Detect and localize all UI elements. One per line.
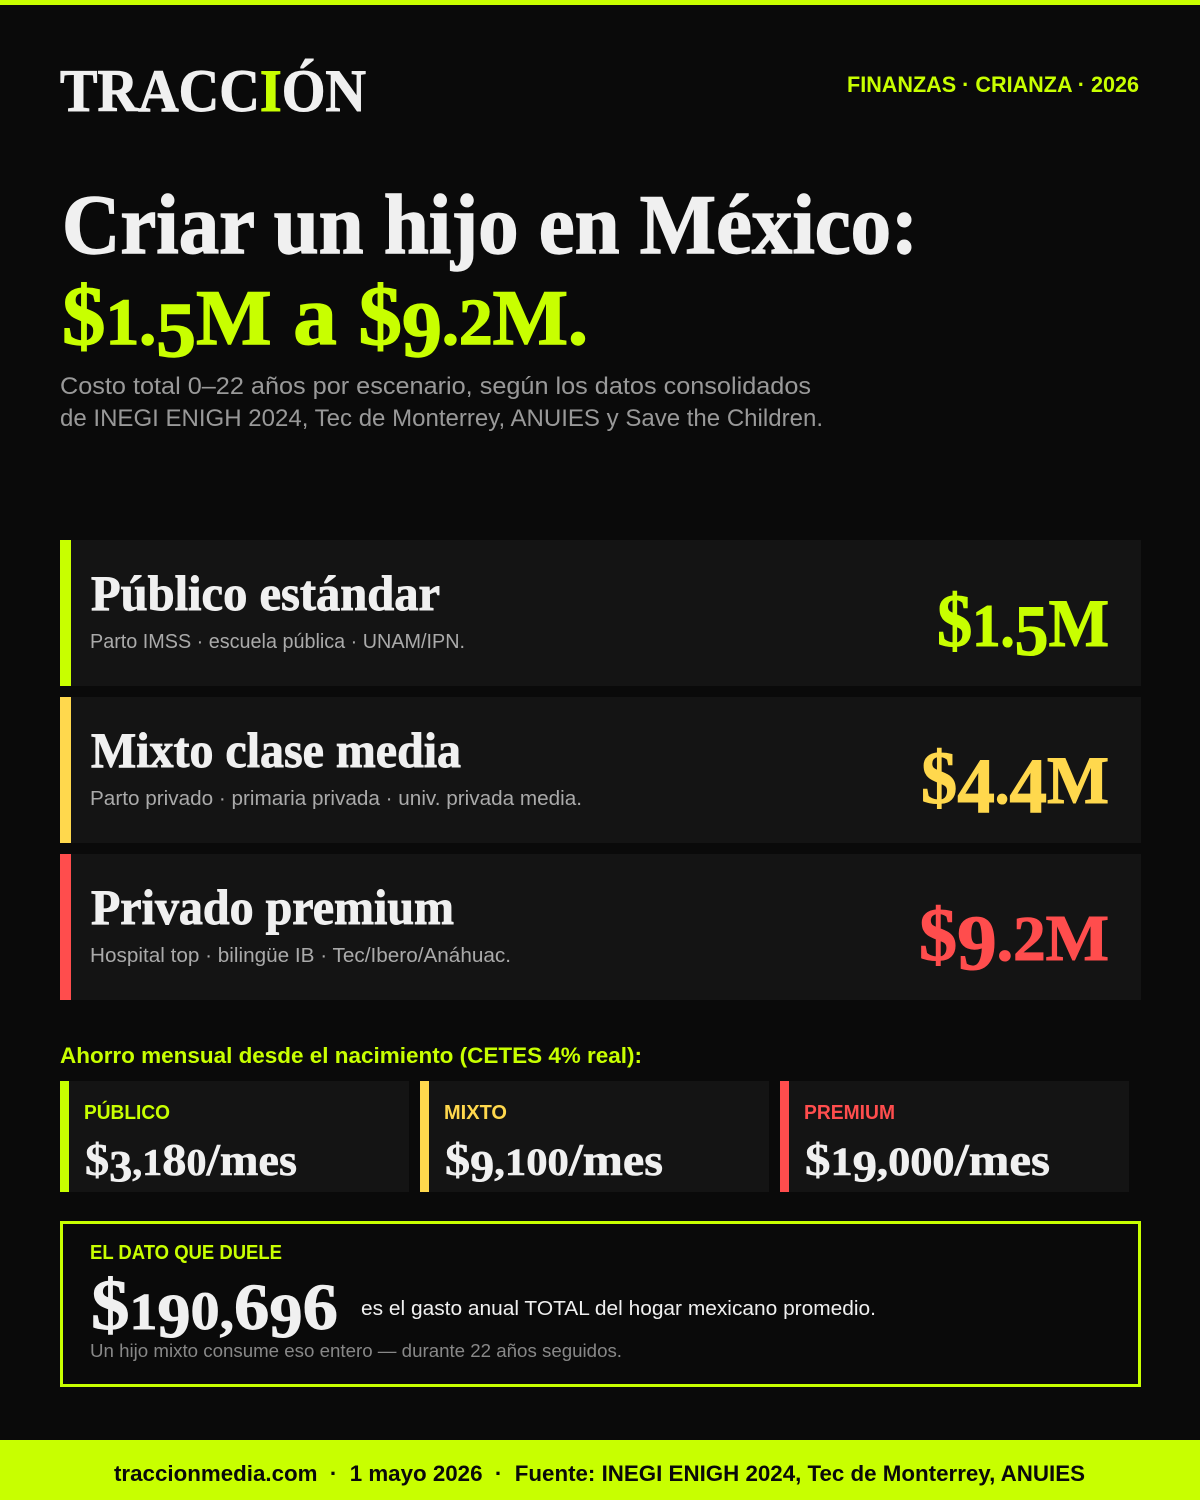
header <box>60 58 1139 124</box>
savings amount: ,100 <box>494 1141 569 1184</box>
scenario cost: 5 <box>1015 591 1049 671</box>
scenario cost: M <box>1046 902 1109 975</box>
callout note: Un hijo mixto consume eso entero — durante 22 años seguidos. <box>90 1341 622 1361</box>
scenario cost: 4 <box>957 742 995 829</box>
savings amount: 9 <box>470 1142 494 1191</box>
savings amount: $ <box>85 1134 108 1185</box>
logo: TRACCIÓN <box>60 58 366 124</box>
scenario cost: 4 <box>1009 742 1047 829</box>
title block <box>62 178 918 373</box>
savings label: PREMIUM <box>804 1102 895 1124</box>
title line 2: M <box>196 274 272 361</box>
savings amount: 80/mes <box>162 1134 293 1185</box>
title line 2: M. <box>493 274 588 361</box>
scenario cost: $ <box>921 737 958 820</box>
scenario cost: $ <box>919 894 956 977</box>
savings amount: /mes <box>955 1134 1042 1185</box>
subtitle: de INEGI ENIGH 2024, Tec de Monterrey, ANUIES y Save the Children. <box>60 405 823 432</box>
savings label: MIXTO <box>444 1102 507 1124</box>
callout figure: $1 <box>91 1265 156 1345</box>
callout figure: 0, <box>191 1281 234 1341</box>
callout figure: 6 <box>234 1271 269 1344</box>
subtitle: Costo total 0–22 años por escenario, según los datos consolidados <box>60 373 811 400</box>
savings amount: ,1 <box>132 1142 162 1184</box>
footer <box>0 1440 1200 1500</box>
scenario description: Parto IMSS · escuela pública · UNAM/IPN. <box>90 631 465 653</box>
scenario cost: M <box>1047 742 1109 818</box>
title line 2: $1. <box>62 269 155 363</box>
scenario cost: M <box>1049 585 1109 661</box>
subtitle <box>60 373 823 432</box>
savings amount: $1 <box>805 1134 850 1185</box>
title line 2: a $ <box>293 269 399 363</box>
panel: ahorro mixto <box>420 1081 769 1192</box>
scenario cost: 9 <box>957 899 997 986</box>
savings amount: $ <box>445 1134 468 1185</box>
panel: privado premium <box>60 854 1141 1000</box>
callout: el dato que duele <box>62 1222 1140 1386</box>
scenario description: Parto privado · primaria privada · univ. privada media. <box>90 788 582 810</box>
title line 2: 9 <box>402 286 442 373</box>
scenario name: Mixto clase media <box>91 722 461 778</box>
title line 2: .2 <box>442 286 493 359</box>
callout label: EL DATO QUE DUELE <box>90 1242 282 1264</box>
savings amount: ,000 <box>877 1139 955 1184</box>
panel: ahorro público <box>60 1081 409 1192</box>
savings amount: /mes <box>569 1134 656 1185</box>
panel: mixto clase media <box>60 697 1141 843</box>
savings label: PÚBLICO <box>84 1100 170 1124</box>
scenario name: Privado premium <box>91 879 454 935</box>
title line 1: Criar un hijo en México: <box>62 178 918 272</box>
scenario cost: $1. <box>937 580 1017 663</box>
panel: público estándar <box>60 540 1141 686</box>
scenario cost: .2 <box>997 903 1046 974</box>
panel: ahorro premium <box>780 1081 1129 1192</box>
scenario cost: . <box>995 750 1009 816</box>
scenario description: Hospital top · bilingüe IB · Tec/Ibero/Anáhuac. <box>90 945 511 967</box>
savings heading: Ahorro mensual desde el nacimiento (CETES 4% real): <box>60 1043 642 1068</box>
callout statement: es el gasto anual TOTAL del hogar mexicano promedio. <box>361 1298 876 1320</box>
header tag: FINANZAS · CRIANZA · 2026 <box>847 72 1139 97</box>
callout figure: 9 <box>269 1283 303 1351</box>
callout figure: 6 <box>303 1271 338 1344</box>
savings amount: 9 <box>853 1142 877 1191</box>
title line 2: 5 <box>156 286 196 373</box>
scenario name: Público estándar <box>91 565 440 621</box>
callout figure: 9 <box>157 1283 191 1351</box>
footer text: traccionmedia.com · 1 mayo 2026 · Fuente: INEGI ENIGH 2024, Tec de Monterrey, ANUIES <box>114 1461 1085 1486</box>
savings amount: 3 <box>109 1142 132 1191</box>
